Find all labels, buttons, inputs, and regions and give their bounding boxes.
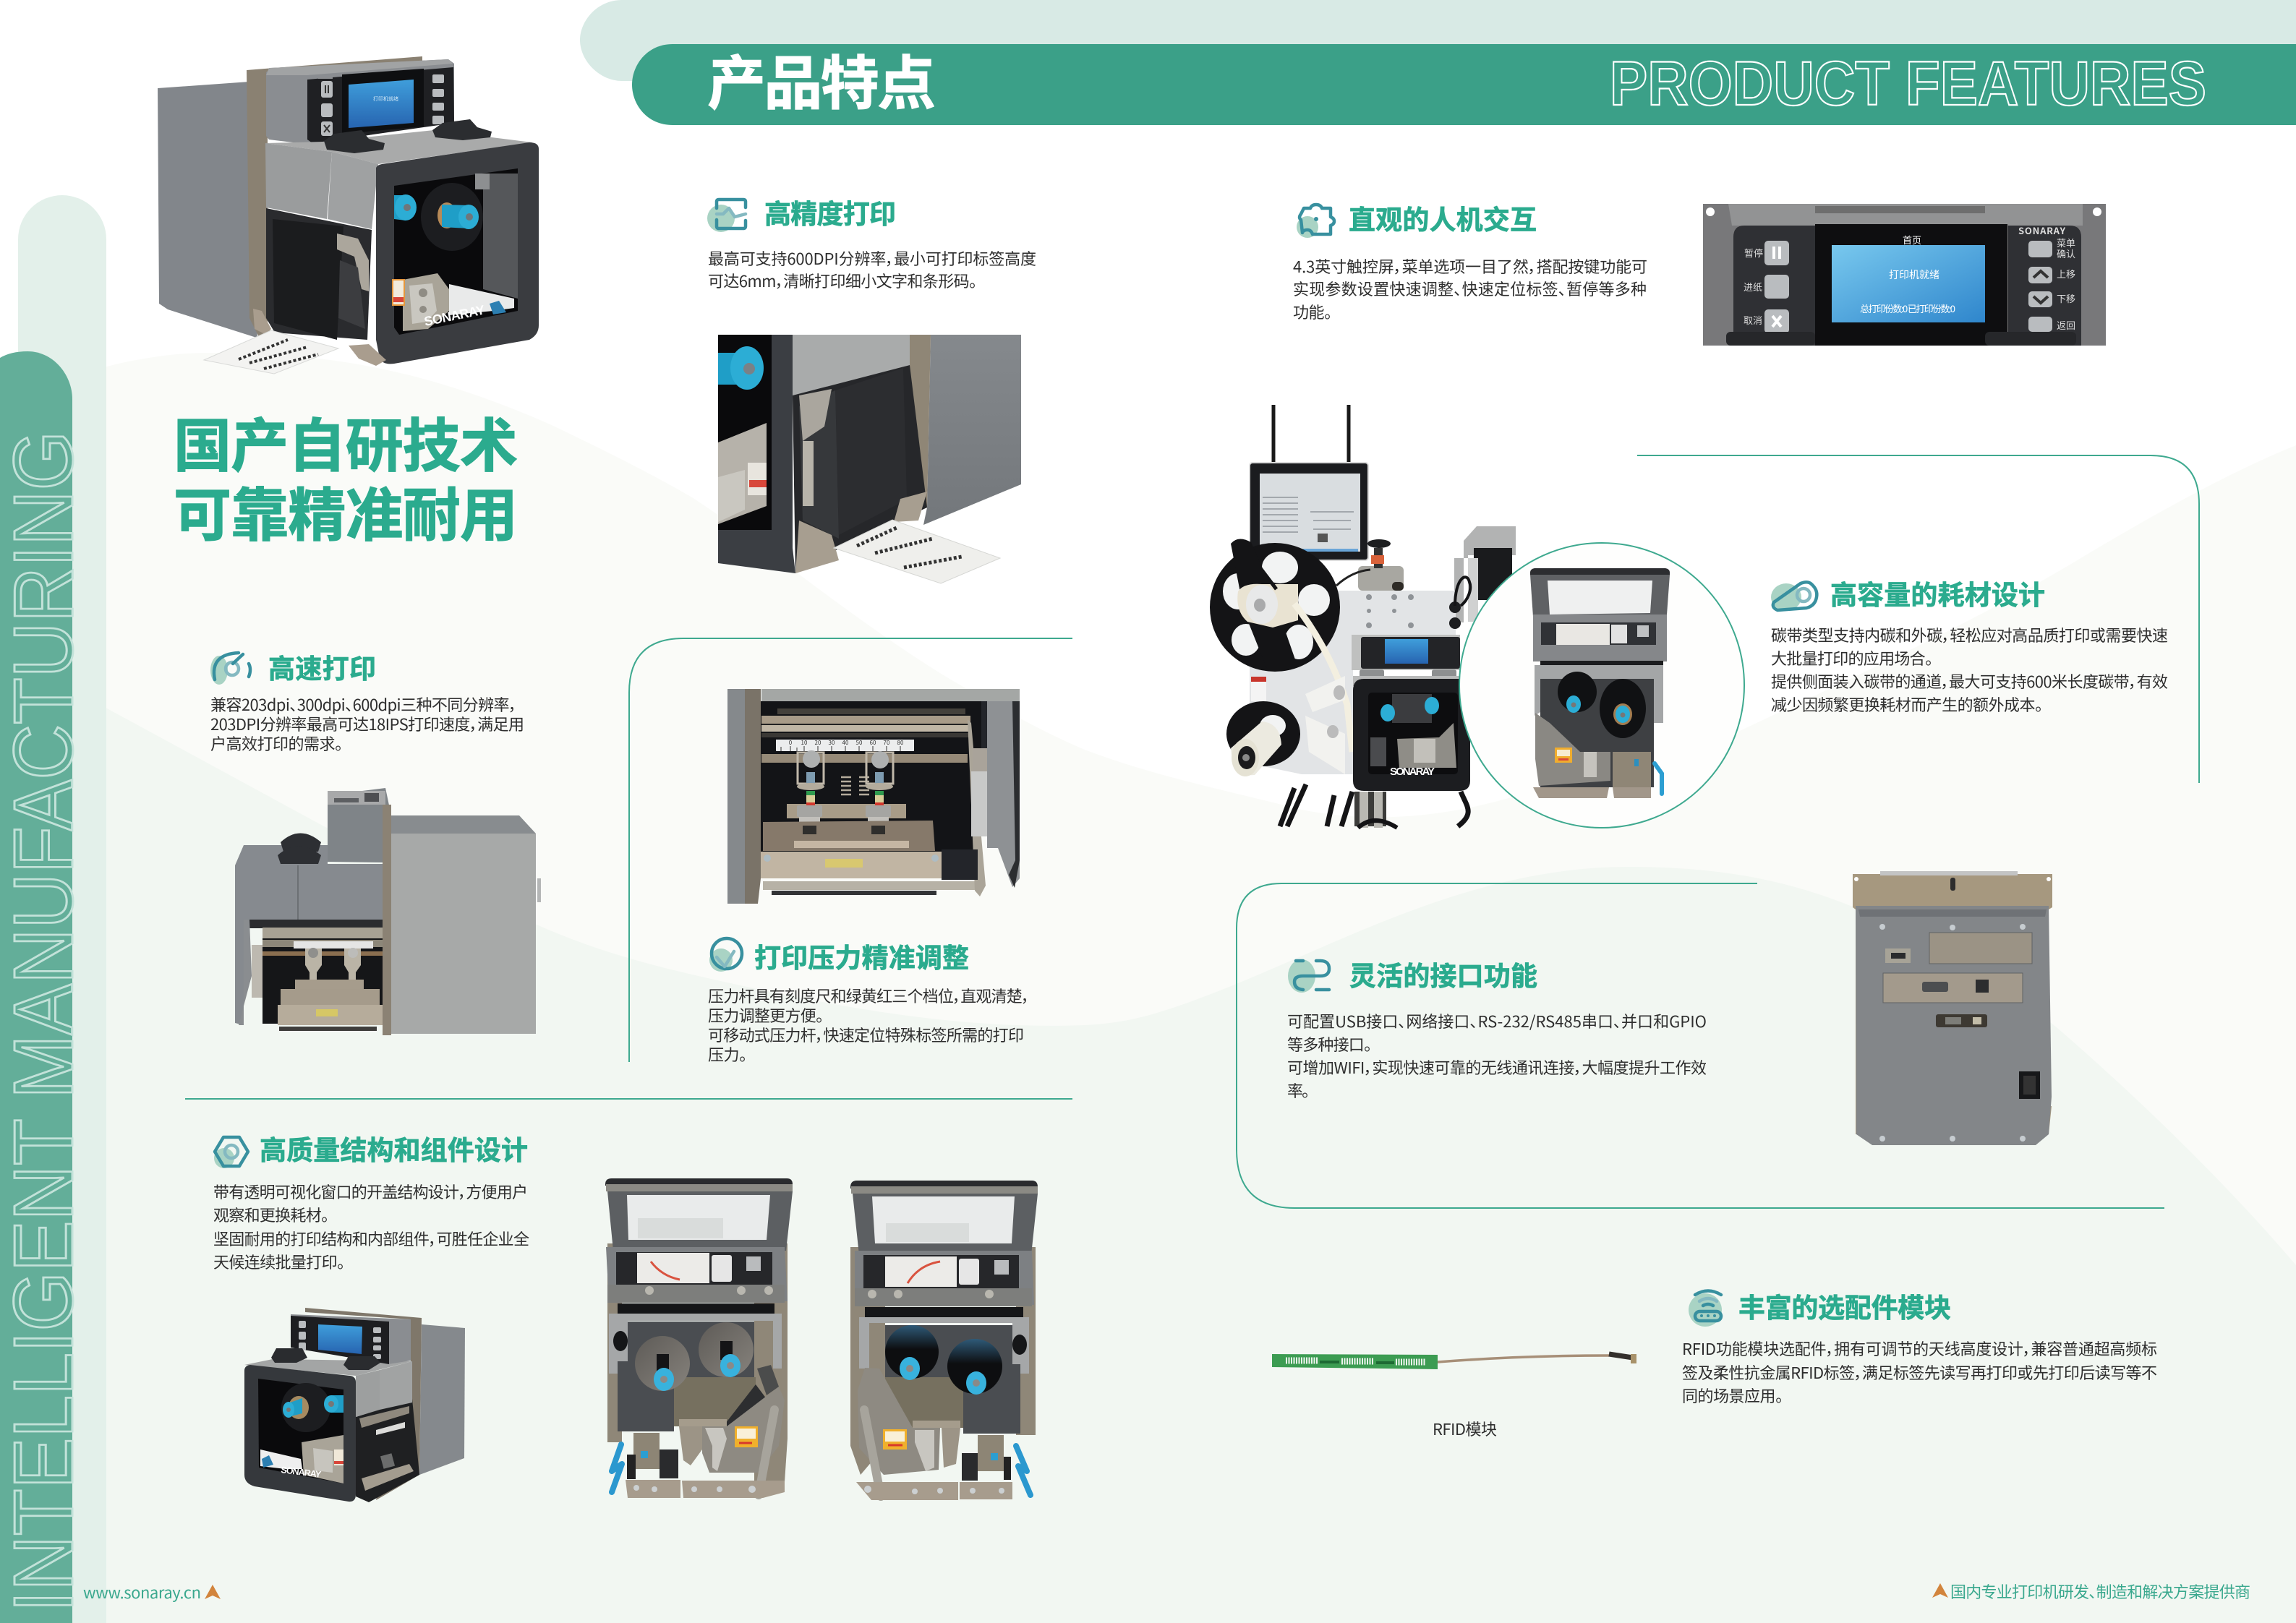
print head (403, 273, 449, 331)
photo: pressure mechanism: 80 (897, 739, 904, 747)
screen and key labels: 取消 (1744, 313, 1762, 327)
text block: 最高可支持600DPI分辨率，最小可打印标签高度 (708, 247, 1036, 270)
icon: cable links (1288, 959, 1329, 993)
pressure knobs (797, 750, 893, 834)
footer: tagline: 国内专业打印机研发、制造和解决方案提供商 (1950, 1580, 2250, 1603)
text block: 兼容203dpi、300dpi、600dpi三种不同分辨率， (210, 693, 517, 716)
text block: 功能。 (1293, 300, 1332, 323)
screen and key labels: 下移 (2057, 291, 2075, 305)
screen and key labels: 进纸 (1744, 280, 1762, 294)
photo: pressure mechanism (727, 689, 1020, 904)
text block: 户高效打印的需求。 (210, 732, 343, 755)
photo: back panel (1853, 871, 2052, 1145)
tan back (850, 1247, 885, 1475)
metal plate (702, 1387, 785, 1473)
grommets (1449, 601, 1461, 613)
icon: hex nut (214, 1137, 248, 1168)
screen and key labels: 打印机就绪 (1889, 267, 1939, 282)
logo: SONARAY: SONARAY (423, 302, 486, 329)
flange (247, 56, 422, 340)
heading: 高容量的耗材设计 (1830, 573, 2045, 612)
control module (291, 1314, 411, 1364)
heading: English title: PRODUCT FEATURES (1610, 49, 2206, 119)
heading: Chinese title: 产品特点 (707, 37, 936, 121)
photo: pressure mechanism: 60 (870, 739, 876, 747)
lower mechanism (978, 1435, 1004, 1471)
knobs (324, 130, 385, 153)
photo: close-up of ribbon (718, 335, 1021, 583)
background: off-white wave (0, 353, 2296, 1623)
text block: 碳带类型支持内碳和外碳，轻松应对高品质打印或需要快速 (1771, 623, 2168, 646)
small reel (1226, 701, 1300, 776)
text block: 带有透明可视化窗口的开盖结构设计，方便用户 (213, 1180, 528, 1203)
background: pale green wave (0, 651, 2296, 1623)
text block (708, 247, 1036, 292)
text block: 提供侧面装入碳带的通道，最大可支持600米长度碳带，有效 (1771, 669, 2168, 693)
screen and key labels: 菜单 (2057, 236, 2075, 249)
mast (1358, 566, 1404, 591)
screen and key labels: 暂停 (1744, 246, 1763, 260)
text block: 实现参数设置快速调整、快速定位标签、暂停等多种 (1293, 277, 1647, 300)
label strip (834, 520, 1000, 583)
cross bar (787, 804, 906, 818)
text block: 坚固耐用的打印结构和内部组件，可胜任企业全 (213, 1227, 529, 1250)
tan back (754, 1243, 788, 1482)
plates (885, 1325, 1012, 1381)
photo: pressure mechanism: 70 (884, 739, 890, 747)
screen and key labels: 总打印份数:0 已打印份数:0 (1860, 301, 1955, 315)
ribbon bay (266, 208, 372, 340)
web path (1294, 604, 1352, 752)
front frame (376, 142, 539, 364)
photo: pressure mechanism: 30 (829, 739, 835, 747)
housing strips (727, 689, 745, 904)
screw strip (607, 1285, 785, 1303)
lid (605, 1178, 793, 1186)
photo: open printer, silver spools (605, 1178, 793, 1498)
footer: website: www.sonaray.cn (83, 1580, 201, 1603)
panel outline: interfaces (1237, 883, 2164, 1208)
knobs (271, 1348, 307, 1363)
panel: print pressure adjustment (708, 936, 1030, 1066)
text block: 可配置USB接口、网络接口、RS-232/RS485串口、并口和GPIO (1287, 1009, 1707, 1032)
panel outline: pressure adjustment (629, 638, 1072, 1062)
icon: ribbon roll (1771, 582, 1817, 611)
logo: SONARAY: SONARAY (281, 1465, 323, 1480)
scale (776, 740, 914, 751)
text block: RFID功能模块选配件，拥有可调节的天线高度设计，兼容普通超高频标 (1682, 1337, 2157, 1360)
text block: 压力杆具有刻度尺和绿黄红三个档位，直观清楚， (708, 984, 1030, 1007)
logo: SONARAY: SONARAY (1390, 766, 1435, 778)
text block (1293, 254, 1647, 323)
text block: 等多种接口。 (1287, 1032, 1372, 1055)
rear housing (158, 82, 263, 340)
text block: 压力调整更方便。 (708, 1003, 824, 1027)
open bay (249, 920, 383, 928)
screen and key labels: 返回 (2057, 318, 2075, 332)
slogan: 国产自研技术 (174, 400, 518, 484)
text block: 4.3英寸触控屏，菜单选项一目了然，搭配按键功能可 (1293, 254, 1647, 278)
photo: pressure mechanism: 40 (842, 739, 849, 747)
panel: high-capacity consumables (1771, 573, 2168, 716)
text block: 签及柔性抗金属RFID标签，满足标签先读写再打印或先打印后读写等不 (1682, 1361, 2157, 1384)
text block (1771, 623, 2168, 716)
panel outline: consumables (1637, 455, 2199, 783)
side plate (968, 719, 986, 896)
text block: 203DPI分辨率最高可达18IPS打印速度，满足用 (210, 712, 524, 735)
photo: pressure mechanism: 10 (801, 739, 808, 747)
print head (302, 1435, 343, 1483)
heading: 灵活的接口功能 (1349, 954, 1537, 993)
bay (356, 1399, 419, 1502)
warning label (1251, 677, 1266, 701)
plates (628, 1322, 754, 1377)
panel: intuitive HMI (1293, 198, 2106, 346)
plate (763, 821, 935, 851)
text block: 率。 (1287, 1079, 1310, 1102)
text block: 同的场景应用。 (1682, 1384, 1783, 1407)
label band (855, 1251, 1034, 1305)
panel: quality structure (213, 1129, 1038, 1502)
big reel (1210, 539, 1340, 672)
tension rollers (1305, 676, 1345, 774)
photo: small front printer (244, 1308, 465, 1502)
text block: 压力。 (708, 1042, 747, 1066)
photo: RFID module (1272, 1354, 1636, 1369)
photo: pressure mechanism: 0 (789, 739, 793, 747)
text block (708, 984, 1030, 1066)
heading: 高速打印 (268, 647, 376, 686)
photo: hero printer (158, 56, 539, 374)
photo: side view printer (235, 788, 541, 1035)
icon: puzzle piece (1297, 205, 1334, 238)
header band (580, 0, 2296, 125)
panel: flexible interfaces (1287, 871, 2052, 1145)
screen and key labels: 首页 (1903, 233, 1921, 247)
metal plate (1535, 713, 1610, 786)
text block: 可达6mm，清晰打印细小文字和条形码。 (708, 269, 977, 292)
text block: 减少因频繁更换耗材而产生的额外成本。 (1771, 693, 2043, 716)
hinges (253, 309, 271, 335)
panel: high precision printing (707, 192, 1036, 583)
rear housing (419, 1324, 465, 1475)
icon: orange triangle (205, 1585, 221, 1599)
heading: 高质量结构和组件设计 (260, 1129, 528, 1168)
screen and key labels: 确认 (2057, 247, 2075, 260)
text block: 天候连续批量打印。 (213, 1250, 345, 1273)
screw strip (855, 1288, 1032, 1306)
heading: 丰富的选配件模块 (1738, 1286, 1951, 1325)
text block (1682, 1337, 2157, 1407)
display on plate (1352, 635, 1460, 670)
antennas (1273, 405, 1349, 463)
divider line (185, 1098, 1072, 1100)
photo: control panel (1703, 204, 2106, 346)
frame (859, 1317, 1029, 1374)
icon: gauge (210, 653, 250, 685)
control module (266, 59, 454, 145)
photo: pressure mechanism: 50 (856, 739, 863, 747)
text block (1287, 1009, 1707, 1102)
panel: high-speed printing (210, 647, 541, 1035)
stand and cables (1280, 784, 1468, 826)
door (987, 689, 1020, 887)
heading: 打印压力精准调整 (754, 936, 969, 975)
photo: pressure mechanism: 20 (815, 739, 821, 747)
screen and key labels: 上移 (2057, 267, 2075, 281)
lower housing (265, 130, 532, 164)
text block: 观察和更换耗材。 (213, 1203, 329, 1226)
slogan (174, 400, 518, 553)
text block: 可增加WIFI，实现快速可靠的无线通讯连接，大幅度提升工作效 (1287, 1055, 1707, 1079)
front block (761, 852, 942, 878)
label strip (204, 330, 338, 374)
lid (850, 1181, 1038, 1189)
dark bay (793, 365, 927, 573)
screen and key labels: SONARAY (2018, 223, 2065, 237)
motor (1454, 526, 1516, 622)
screen text: 打印机就绪 (373, 95, 398, 102)
heading: 高精度打印 (764, 192, 896, 231)
interior (761, 701, 981, 853)
rail (761, 754, 968, 763)
screen and key labels (1744, 223, 2075, 332)
upper housing (244, 1359, 412, 1376)
monitor (1250, 463, 1368, 560)
photo: open printer, dark spools (850, 1181, 1038, 1500)
text block: 大批量打印的应用场合。 (1771, 646, 1933, 669)
heading: 直观的人机交互 (1349, 198, 1537, 237)
icon: waveform bracket (707, 200, 746, 232)
side strip: pale pill (18, 195, 106, 1623)
frame (609, 1314, 782, 1374)
photo: applicator machine (1210, 405, 1516, 828)
metal plate (858, 1368, 940, 1475)
text block (210, 693, 524, 755)
lower mechanism (633, 1433, 660, 1469)
callout circle: open printer (1459, 543, 1744, 828)
panel: optional modules (1272, 1286, 2157, 1440)
label band (606, 1247, 788, 1301)
text block (213, 1180, 529, 1273)
base plate (1250, 591, 1456, 774)
printer head (1353, 676, 1461, 686)
spools (635, 1336, 690, 1391)
spools (885, 1325, 939, 1379)
icon: dial check (709, 938, 742, 972)
slogan: 可靠精准耐用 (174, 469, 518, 553)
text block: 可移动式压力杆，快速定位特殊标签所需的打印 (708, 1023, 1024, 1046)
roller (761, 716, 970, 724)
icon: wifi router (1689, 1291, 1722, 1327)
front frame (244, 1365, 356, 1502)
springs (841, 777, 869, 795)
caption: RFID模块 (1433, 1417, 1497, 1440)
